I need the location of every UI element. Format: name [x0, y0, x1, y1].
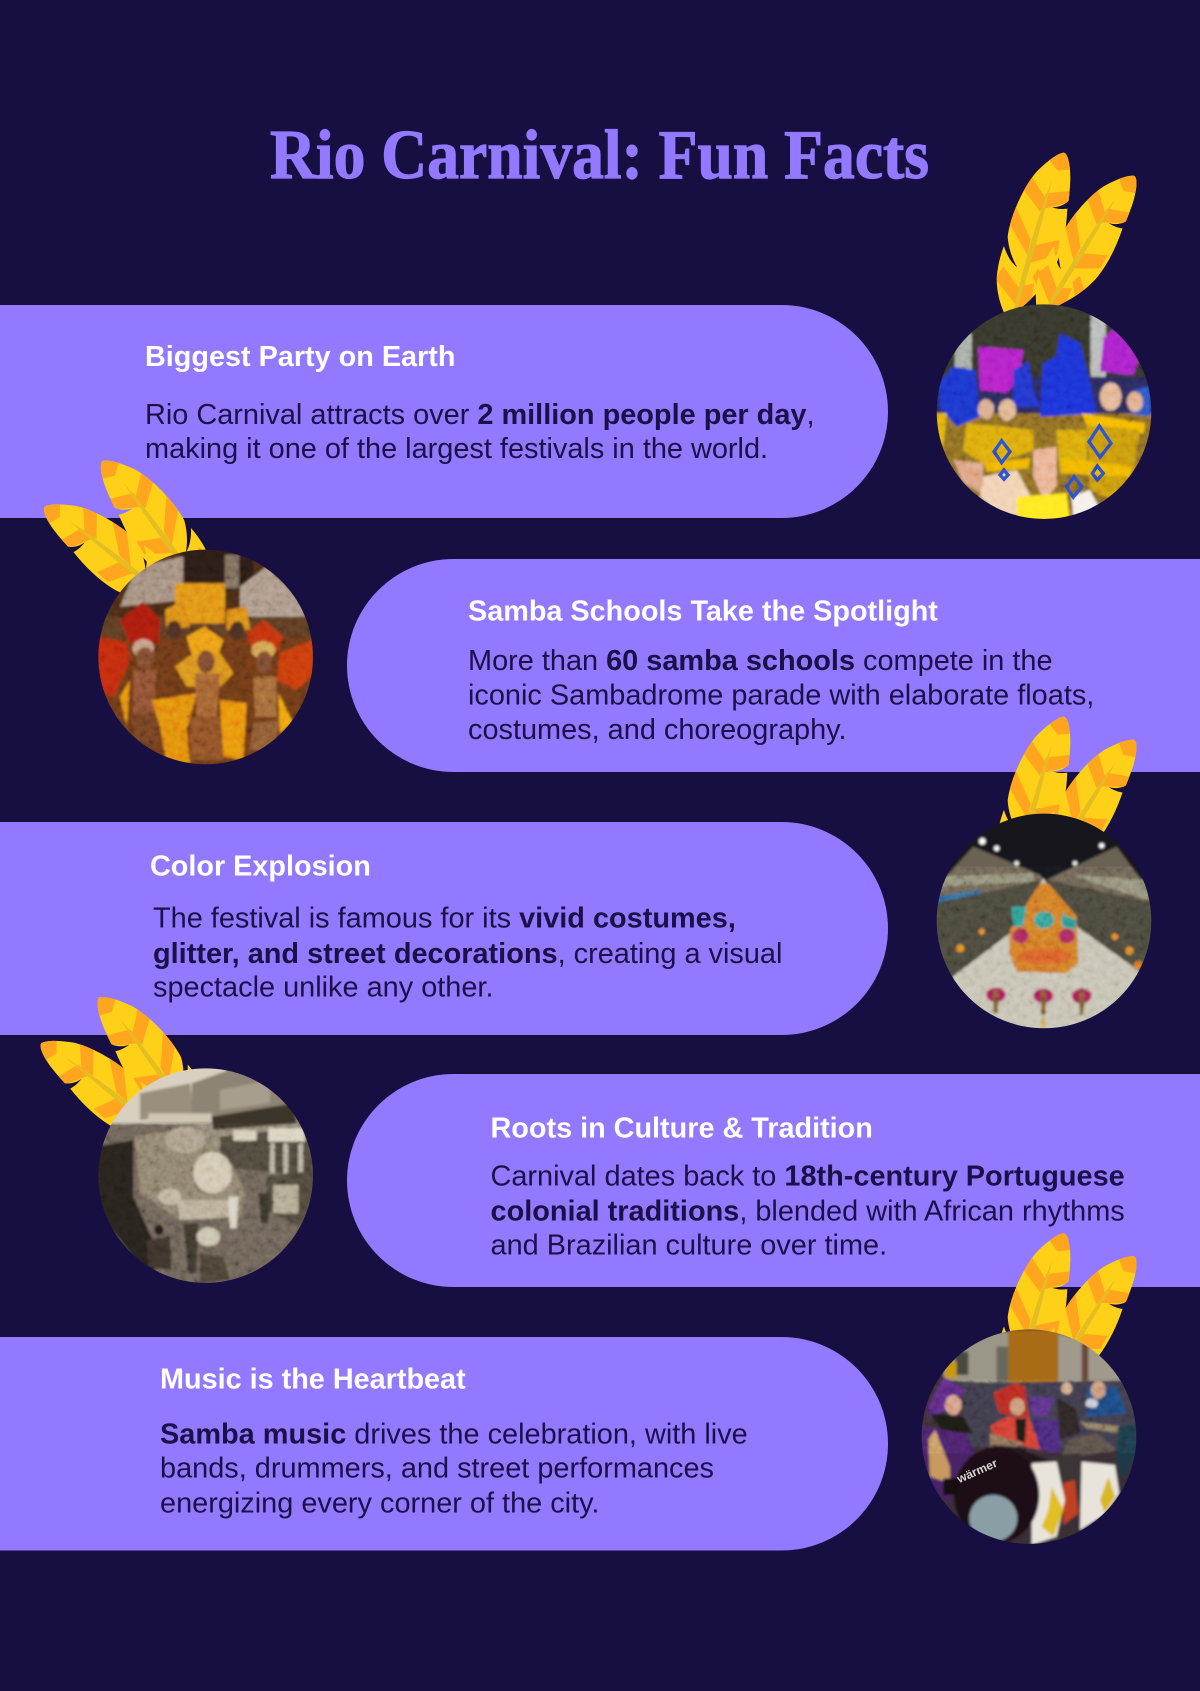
- text block: roots in culture: and Brazilian culture over time.: [490, 1230, 887, 1262]
- text block: color explosion: [153, 902, 782, 1004]
- photo: drummers in street parade: [920, 1327, 1140, 1547]
- text block: samba schools: More than 60 samba schools compete in the: [468, 645, 1053, 677]
- text block: music is the heartbeat: bands, drummers, and street performances: [160, 1452, 714, 1484]
- text block: roots in culture: Carnival dates back to 18th-century Portuguese: [490, 1160, 1125, 1192]
- drum lettering: wärmer: [954, 1456, 1000, 1486]
- text block: biggest party on earth: Rio Carnival attracts over 2 million people per day,: [145, 399, 815, 431]
- icon: feathers 3: [995, 711, 1144, 891]
- text block: color explosion: glitter, and street decorations, creating a visual: [153, 938, 782, 970]
- text block: samba schools: iconic Sambadrome parade with elaborate floats,: [468, 680, 1094, 712]
- text block: color explosion: The festival is famous for its vivid costumes,: [153, 902, 736, 934]
- photo: dancers in red and orange: [98, 550, 313, 764]
- text block: color explosion: spectacle unlike any other.: [153, 972, 493, 1004]
- heading: roots in culture: Roots in Culture & Tradition: [490, 1112, 873, 1144]
- heading: music is the heartbeat: Music is the Heartbeat: [160, 1364, 466, 1396]
- title: Rio Carnival: Fun Facts: [270, 117, 929, 194]
- panel: roots in culture: [347, 1074, 1200, 1287]
- text block: samba schools: [468, 645, 1094, 746]
- heading: color explosion: Color Explosion: [150, 850, 371, 882]
- icon: feathers 1: [995, 147, 1144, 327]
- heading: biggest party on earth: Biggest Party on Earth: [145, 341, 455, 373]
- panel: music is the heartbeat: [0, 1337, 888, 1550]
- panel: biggest party on earth: [0, 305, 888, 518]
- heading: samba schools: Samba Schools Take the Spotlight: [468, 596, 938, 628]
- photo: dancers with blue and magenta plumes: [936, 304, 1152, 519]
- text block: music is the heartbeat: energizing every corner of the city.: [160, 1488, 599, 1520]
- text block: biggest party on earth: making it one of the largest festivals in the world.: [145, 433, 768, 465]
- panel: samba schools: [347, 559, 1200, 772]
- text block: music is the heartbeat: Samba music drives the celebration, with live: [160, 1418, 748, 1450]
- text block: roots in culture: colonial traditions, blended with African rhythms: [490, 1196, 1125, 1228]
- icon: feathers 5: [995, 1227, 1144, 1407]
- text block: samba schools: costumes, and choreography.: [468, 714, 846, 746]
- text block: biggest party on earth: [145, 399, 815, 465]
- panel: color explosion: [0, 822, 888, 1035]
- photo: vintage sepia street parade: [98, 1068, 313, 1283]
- icon: feathers 2: [25, 432, 227, 652]
- icon: feathers 4: [22, 968, 224, 1188]
- costume diamonds: [994, 426, 1111, 497]
- photo: Sambadrome parade: [933, 810, 1157, 1033]
- text block: roots in culture: [490, 1160, 1125, 1262]
- text block: music is the heartbeat: [160, 1418, 748, 1520]
